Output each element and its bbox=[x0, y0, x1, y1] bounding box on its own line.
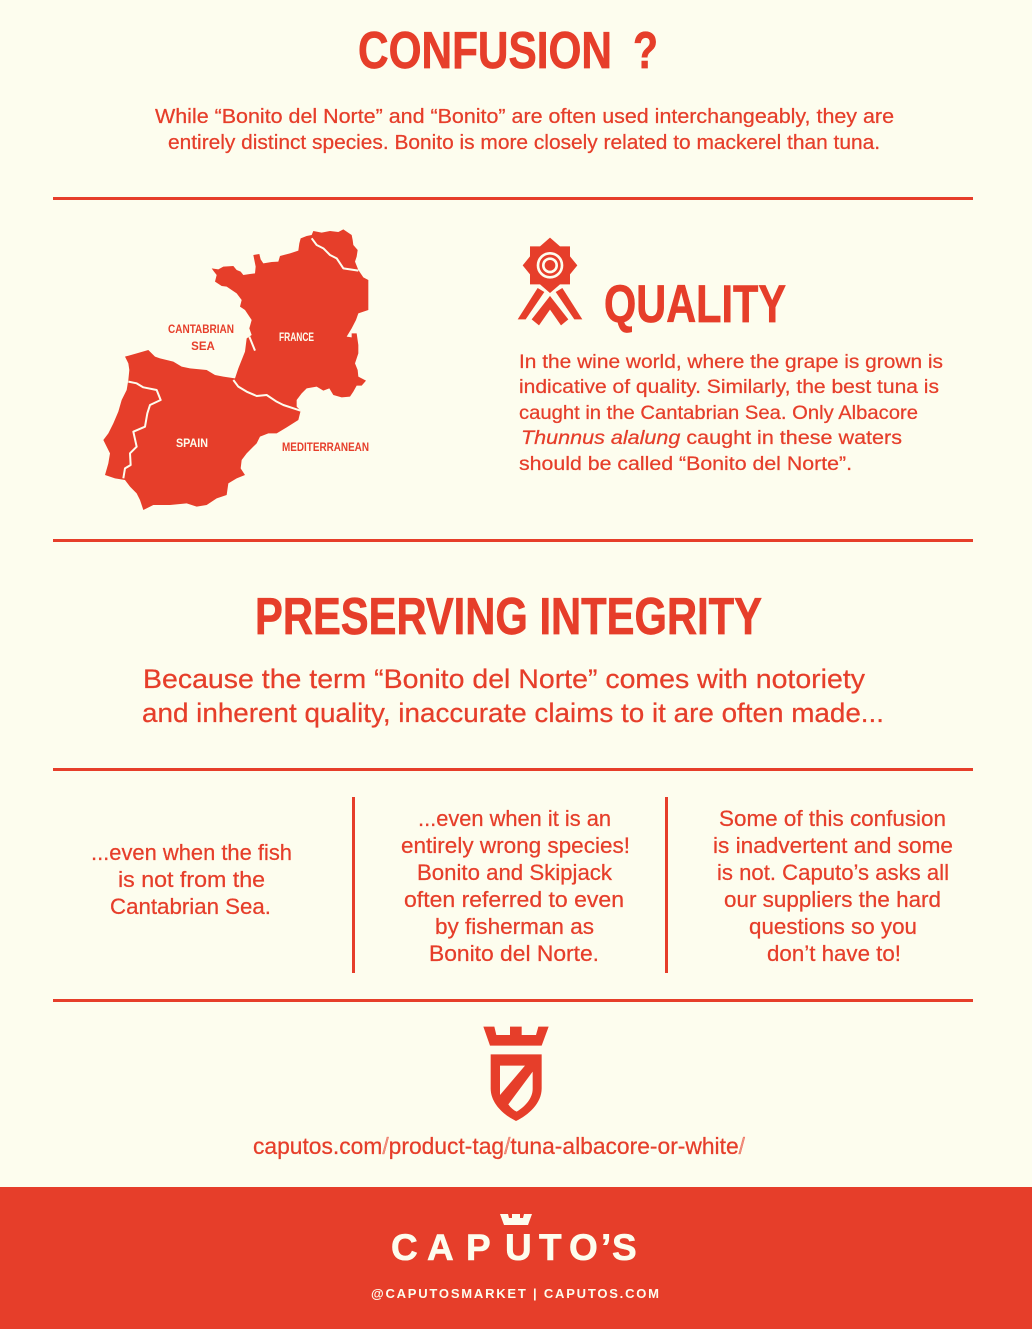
text block: column 2: Bonito del Norte. bbox=[429, 941, 599, 966]
text block: column 1 bbox=[91, 840, 292, 919]
text block: column 3: questions so you bbox=[749, 914, 917, 939]
map label: Cantabrian Sea: CANTABRIAN bbox=[168, 324, 234, 336]
map: France, Spain and Portugal bbox=[103, 229, 369, 510]
text block: column 1: Cantabrian Sea. bbox=[110, 894, 271, 919]
icon: footer crown bbox=[500, 1214, 532, 1225]
text block: quality body: In the wine world, where the grape is grown is bbox=[519, 351, 943, 373]
icon: quality medal bbox=[518, 238, 582, 325]
footer logo wordmark: CAPUTO’S bbox=[391, 1227, 637, 1268]
text block: column 3: is inadvertent and some bbox=[713, 833, 953, 858]
text block: confusion intro: entirely distinct species. Bonito is more closely related to mackerel than tuna. bbox=[168, 132, 880, 154]
map label: Mediterranean: MEDITERRANEAN bbox=[282, 442, 369, 454]
map label: Spain: SPAIN bbox=[176, 438, 208, 450]
map label: Cantabrian Sea: SEA bbox=[191, 341, 215, 353]
link: product url: caputos.com/product-tag/tuna-albacore-or-white/ bbox=[253, 1133, 746, 1159]
text block: column 2: often referred to even bbox=[404, 887, 624, 912]
map label: Cantabrian Sea bbox=[168, 324, 234, 353]
text block: preserving integrity intro bbox=[142, 664, 884, 728]
text block: column 3 bbox=[713, 806, 953, 966]
footer contact line: @CAPUTOSMARKET | CAPUTOS.COM bbox=[371, 1286, 659, 1301]
footer band bbox=[0, 1187, 1032, 1329]
text block: quality body: indicative of quality. Similarly, the best tuna is bbox=[519, 376, 939, 398]
text block: column 2: ...even when it is an bbox=[418, 806, 611, 831]
text block: preserving integrity intro: Because the term “Bonito del Norte” comes with notoriety bbox=[143, 664, 866, 694]
text block: column 3: Some of this confusion bbox=[719, 806, 946, 831]
text block: column 2: by fisherman as bbox=[435, 914, 594, 939]
text block: quality body: caught in the Cantabrian Sea. Only Albacore bbox=[519, 402, 918, 424]
text block: preserving integrity intro: and inherent quality, inaccurate claims to it are often made... bbox=[142, 698, 884, 728]
text block: quality body: Thunnus alalung caught in these waters bbox=[521, 427, 902, 449]
map label: France: FRANCE bbox=[279, 332, 314, 344]
text block: column 2: entirely wrong species! bbox=[401, 833, 630, 858]
text block: confusion intro: While “Bonito del Norte” and “Bonito” are often used interchangeably, they are bbox=[155, 106, 894, 128]
title: Confusion: CONFUSION bbox=[358, 22, 612, 80]
title: Confusion: ? bbox=[633, 22, 658, 80]
text block: column 2 bbox=[401, 806, 630, 966]
text block: column 3: don’t have to! bbox=[767, 941, 901, 966]
text block: quality body bbox=[519, 351, 943, 475]
heading: Preserving Integrity: PRESERVING INTEGRITY bbox=[255, 588, 762, 646]
text block: quality body: should be called “Bonito del Norte”. bbox=[519, 453, 852, 475]
text block: column 1: is not from the bbox=[118, 867, 265, 892]
heading: Quality: QUALITY bbox=[604, 275, 786, 334]
text block: column 2: Bonito and Skipjack bbox=[417, 860, 613, 885]
text block: column 3: is not. Caputo’s asks all bbox=[717, 860, 949, 885]
text block: column 3: our suppliers the hard bbox=[724, 887, 941, 912]
text block: confusion intro bbox=[155, 106, 894, 154]
icon: crowned shield logo bbox=[483, 1027, 549, 1121]
text block: column 1: ...even when the fish bbox=[91, 840, 292, 865]
